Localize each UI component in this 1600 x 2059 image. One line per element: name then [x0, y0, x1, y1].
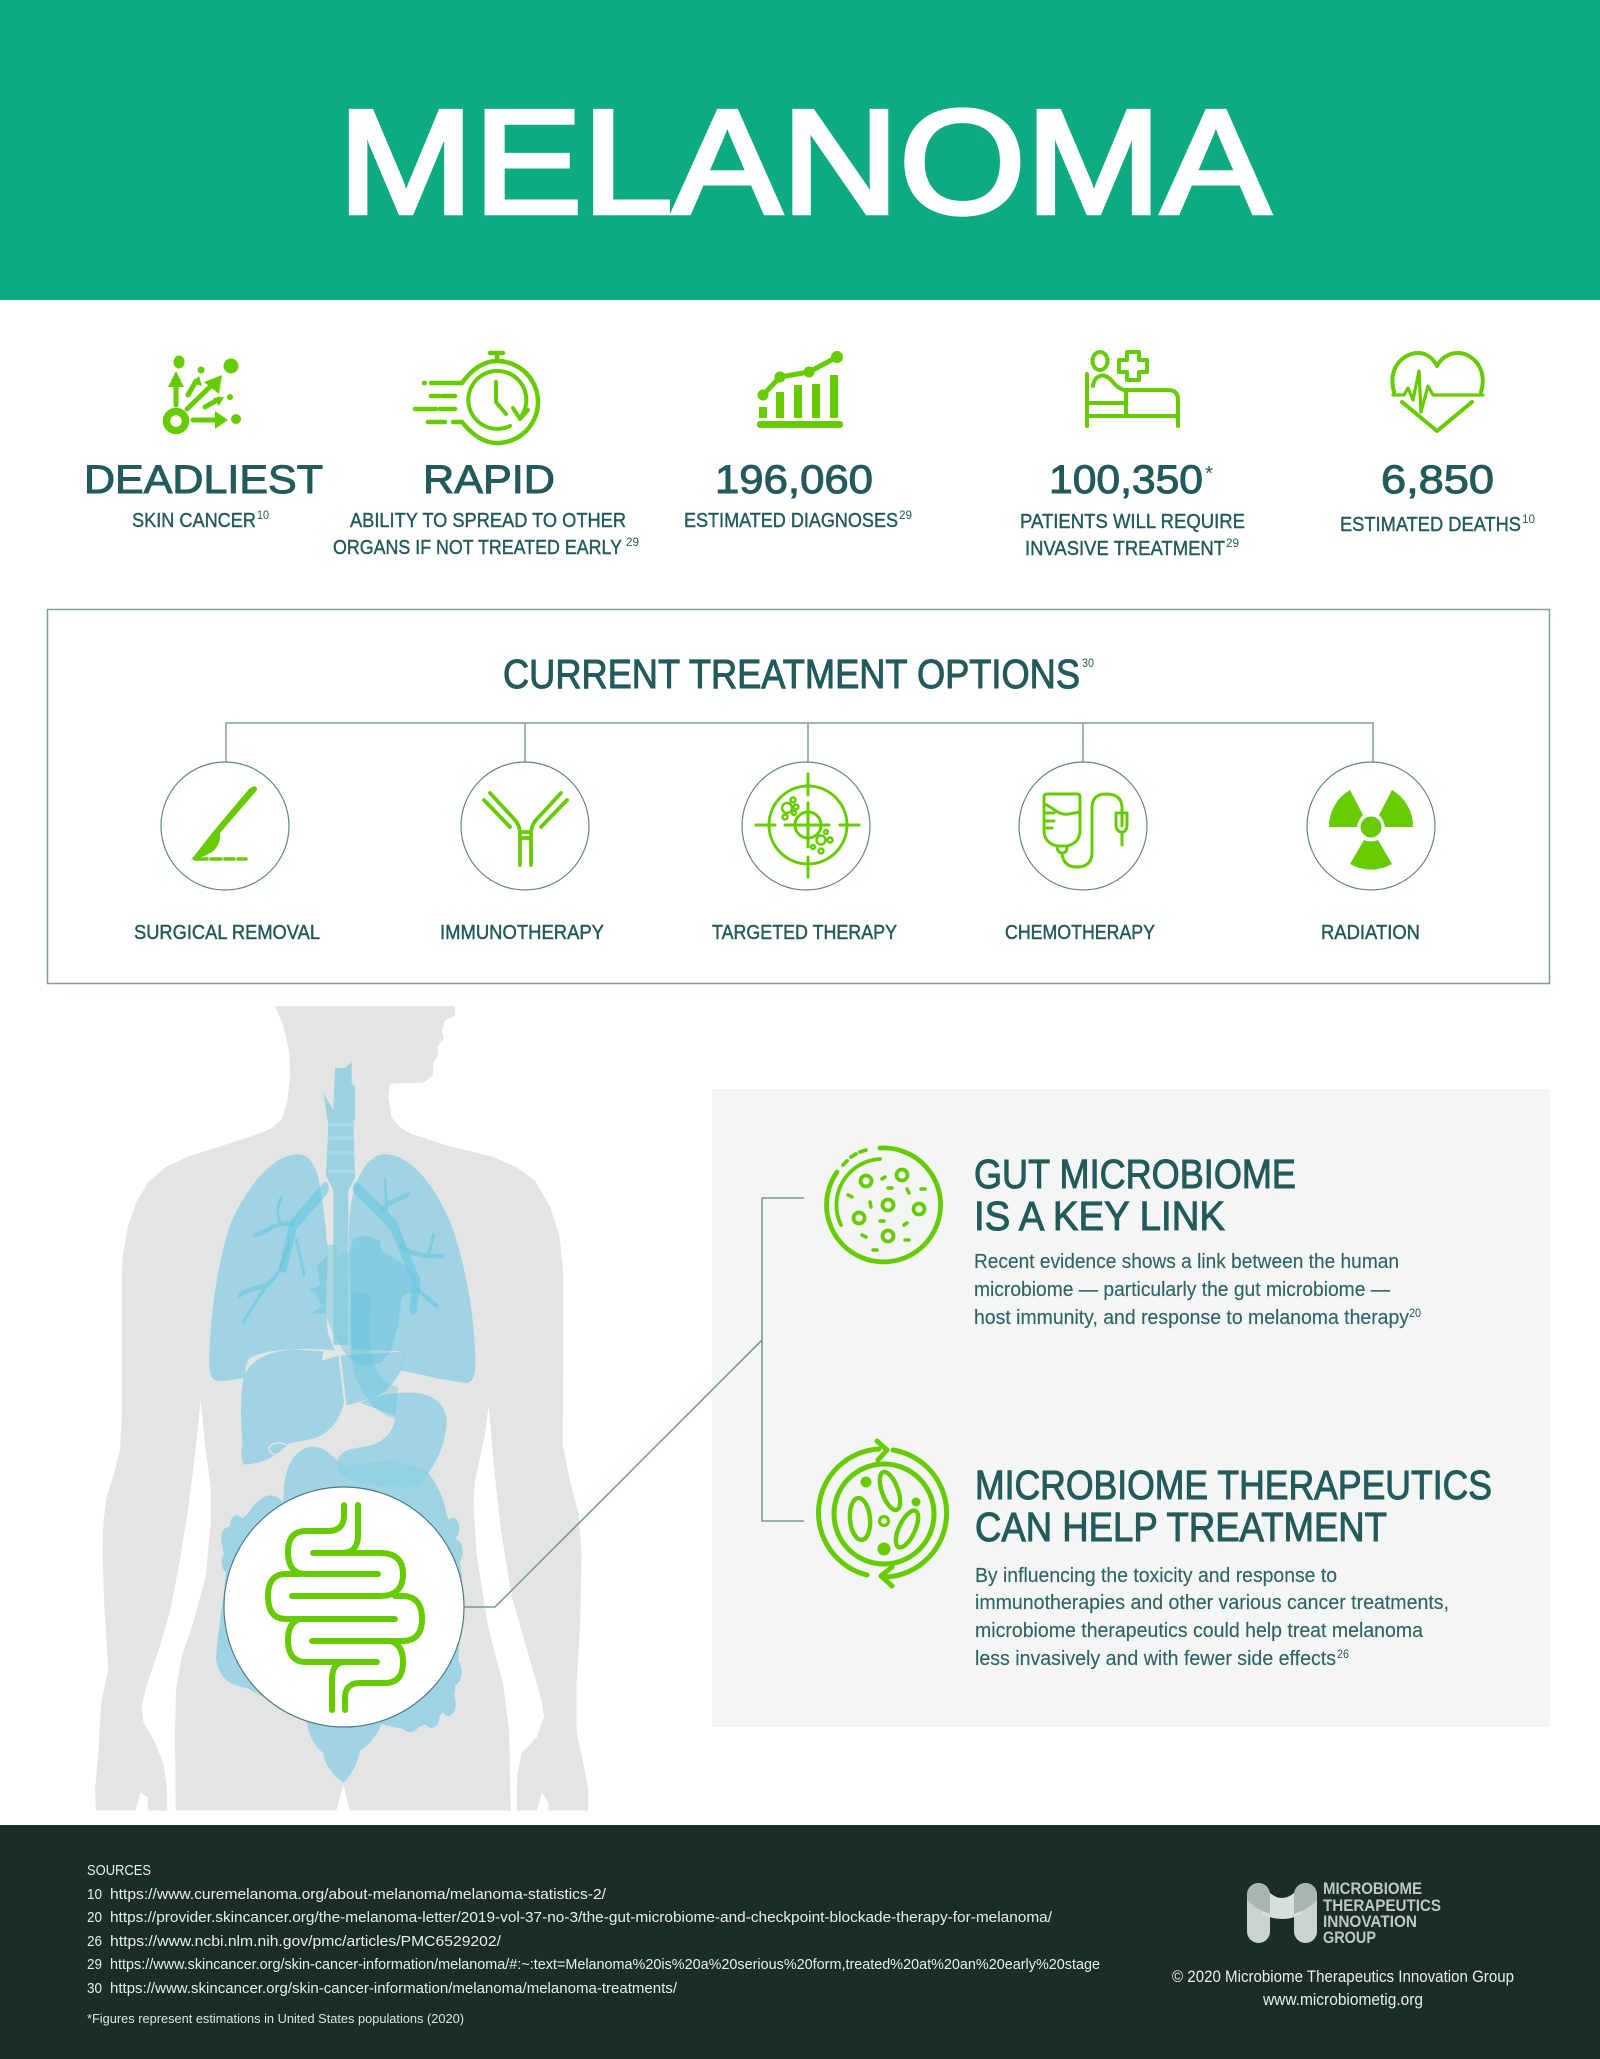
panel: current treatment options: [48, 610, 1550, 984]
stat: invasive treatment: 29: [1226, 536, 1239, 550]
sources list: 29: [87, 1956, 102, 1973]
sources list: 30: [87, 1980, 102, 1997]
treatment: radiation: RADIATION: [1321, 922, 1420, 944]
stat: invasive treatment: *: [1205, 463, 1213, 485]
body silhouette: [95, 1006, 588, 1812]
bronchi: [239, 1180, 443, 1322]
magnified gut circle: [224, 1487, 464, 1727]
footer: [0, 1825, 1600, 2059]
section: gut microbiome: GUT MICROBIOME: [974, 1151, 1296, 1197]
icon: hospital bed: [1087, 352, 1178, 426]
section: microbiome therapeutics: microbiome therapeutics could help treat melanoma: [975, 1620, 1424, 1642]
heart: [308, 1235, 420, 1366]
sources list: *Figures represent estimations in United States populations (2020): [87, 2011, 464, 2026]
gallbladder detail: [269, 1443, 289, 1455]
sources list: [87, 1862, 1100, 2026]
stat: deaths: ESTIMATED DEATHS: [1340, 514, 1521, 536]
icon: intestines: [268, 1505, 422, 1710]
logo: THERAPEUTICS: [1323, 1897, 1441, 1915]
icon: microbes with cycle arrows: [818, 1441, 947, 1586]
sources list: https://www.ncbi.nlm.nih.gov/pmc/articles/PMC6529202/: [110, 1933, 502, 1950]
section: microbiome therapeutics: [818, 1441, 1492, 1670]
stat: rapid: 29: [626, 535, 639, 549]
stat: invasive treatment: [1020, 352, 1245, 560]
treatment: chemotherapy: CHEMOTHERAPY: [1005, 922, 1155, 944]
stat: rapid: [333, 353, 639, 559]
logo: [1247, 1880, 1441, 1947]
treatment: immunotherapy: [440, 762, 604, 944]
icon: rising bar chart: [757, 351, 843, 428]
stat: deaths: 10: [1522, 512, 1535, 526]
trachea: [323, 1062, 355, 1345]
stat: diagnoses: ESTIMATED DIAGNOSES: [684, 510, 898, 532]
section: gut microbiome: host immunity, and response to melanoma therapy: [974, 1307, 1409, 1329]
stat: rapid: RAPID: [423, 458, 555, 502]
treatment: surgical removal: [134, 762, 320, 944]
section: microbiome therapeutics: MICROBIOME THERAPEUTICS: [975, 1462, 1492, 1508]
section: gut microbiome: [827, 1148, 1421, 1329]
section: microbiome therapeutics: By influencing the toxicity and response to: [975, 1565, 1337, 1587]
liver: [241, 1349, 344, 1464]
treatment: radiation: [1307, 762, 1435, 944]
stat: diagnoses: [684, 351, 912, 532]
esophagus: [360, 1293, 397, 1403]
logo: MICROBIOME: [1323, 1880, 1422, 1898]
stat: deadliest: DEADLIEST: [84, 458, 323, 502]
sources list: https://www.skincancer.org/skin-cancer-information/melanoma/#:~:text=Melanoma%20is%20a%20serious%20form,treated%20at%20an%20early%20stage: [110, 1956, 1100, 1973]
header banner: [0, 0, 1600, 300]
stat: invasive treatment: 100,350: [1049, 458, 1203, 502]
sources list: https://provider.skincancer.org/the-melanoma-letter/2019-vol-37-no-3/the-gut-microbiome-and-checkpoint-blockade-therapy-for-melanoma/: [110, 1909, 1053, 1926]
organs: [209, 1062, 475, 1783]
sources list: SOURCES: [87, 1862, 151, 1879]
icon: target with cells: [756, 774, 859, 877]
logo mark: [1247, 1883, 1317, 1943]
body illustration: [95, 1006, 588, 1812]
colon and intestines: [216, 1446, 463, 1783]
section: gut microbiome: Recent evidence shows a link between the human: [974, 1251, 1399, 1273]
treatment: immunotherapy: IMMUNOTHERAPY: [440, 922, 604, 944]
icon: heart with pulse: [1392, 353, 1483, 431]
lungs: [209, 1154, 475, 1487]
icon: stopwatch: [415, 353, 538, 443]
section: microbiome therapeutics: less invasively and with fewer side effects: [975, 1648, 1336, 1670]
logo: INNOVATION: [1323, 1913, 1417, 1931]
heading: current treatment options: 30: [1082, 656, 1094, 670]
stat: deadliest: 10: [257, 508, 269, 522]
section: microbiome therapeutics: CAN HELP TREATMENT: [975, 1504, 1387, 1550]
icon: petri dish microbes: [827, 1148, 941, 1262]
section: gut microbiome: IS A KEY LINK: [974, 1193, 1225, 1239]
treatment: chemotherapy: [1005, 762, 1155, 944]
icon: antibody: [484, 793, 567, 865]
icon: scalpel: [191, 786, 257, 860]
treatment: surgical removal: SURGICAL REMOVAL: [134, 922, 320, 944]
stat: diagnoses: 29: [899, 508, 912, 522]
section: gut microbiome: microbiome — particularly the gut microbiome —: [974, 1279, 1390, 1301]
stomach: [337, 1351, 447, 1487]
stat: diagnoses: 196,060: [715, 458, 873, 502]
stat: rapid: ORGANS IF NOT TREATED EARLY: [333, 537, 622, 559]
stat: deadliest: SKIN CANCER: [132, 510, 256, 532]
stat: rapid: ABILITY TO SPREAD TO OTHER: [350, 510, 626, 532]
section: microbiome therapeutics: immunotherapies and other various cancer treatments,: [975, 1592, 1449, 1614]
stat: deaths: 6,850: [1381, 458, 1494, 502]
connector lines: [464, 1198, 804, 1607]
website: www.microbiometig.org: [1262, 1991, 1423, 2009]
title: MELANOMA: [338, 80, 1270, 245]
sources list: 26: [87, 1933, 102, 1950]
icon: radiation symbol: [1329, 790, 1413, 870]
stat: invasive treatment: INVASIVE TREATMENT: [1025, 538, 1225, 560]
logo: GROUP: [1323, 1929, 1376, 1947]
treatment: targeted therapy: [712, 762, 897, 944]
copyright: © 2020 Microbiome Therapeutics Innovation Group: [1172, 1968, 1514, 1986]
panel: microbiome: [464, 1089, 1550, 1727]
stat: deaths: [1340, 353, 1535, 536]
icon: iv drip: [1044, 794, 1127, 867]
treatment: targeted therapy: TARGETED THERAPY: [712, 922, 897, 944]
sources list: 10: [87, 1886, 102, 1903]
heading: current treatment options: CURRENT TREATMENT OPTIONS: [503, 651, 1080, 697]
section: microbiome therapeutics: 26: [1337, 1647, 1349, 1661]
icon: spreading arrows: [166, 356, 241, 430]
section: gut microbiome: 20: [1409, 1306, 1421, 1320]
stat: invasive treatment: PATIENTS WILL REQUIRE: [1020, 511, 1245, 533]
sources list: https://www.curemelanoma.org/about-melanoma/melanoma-statistics-2/: [110, 1886, 607, 1903]
stat: deadliest: [84, 356, 323, 532]
sources list: https://www.skincancer.org/skin-cancer-information/melanoma/melanoma-treatments/: [110, 1980, 678, 1997]
sources list: 20: [87, 1909, 102, 1926]
